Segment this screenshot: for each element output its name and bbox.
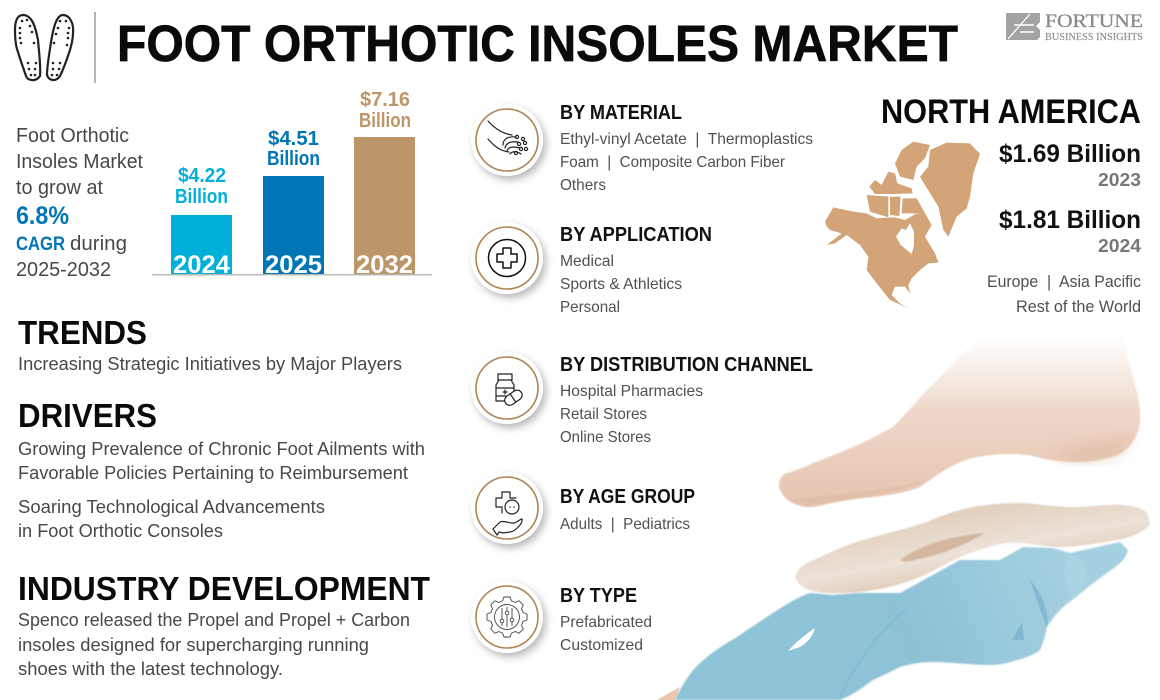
growth summary text: to grow at <box>16 177 103 199</box>
by material: Foam | Composite Carbon Fiber <box>560 154 786 171</box>
growth summary text: 2025-2032 <box>16 259 111 281</box>
by distribution channel <box>560 354 813 446</box>
icon: medical cross <box>471 222 543 294</box>
industry development: INDUSTRY DEVELOPMENT <box>18 570 430 607</box>
trends <box>18 314 402 374</box>
bar chart: market size <box>152 89 432 279</box>
bar chart: market size: Billion <box>359 110 411 132</box>
by application: Medical <box>560 253 614 270</box>
by age group: BY AGE GROUP <box>560 486 695 508</box>
growth summary text: 6.8% <box>16 202 69 230</box>
drivers: in Foot Orthotic Consoles <box>18 521 223 541</box>
by application: Personal <box>560 299 620 316</box>
by material: Ethyl-vinyl Acetate | Thermoplastics <box>560 131 813 148</box>
skin at wrist <box>657 687 680 700</box>
industry development: Spenco released the Propel and Propel + Carbon <box>18 610 410 630</box>
by age group <box>560 486 695 533</box>
bar chart: market size: Billion <box>175 186 228 208</box>
north america values: 2024 <box>1098 236 1141 256</box>
map: north america <box>825 142 980 310</box>
trends: TRENDS <box>18 314 147 351</box>
drivers <box>18 397 425 541</box>
by type: Prefabricated <box>560 614 652 631</box>
bar chart: market size: 2025 <box>265 251 322 279</box>
title icon: insole pair <box>15 15 73 80</box>
icon: material fibers <box>471 104 543 176</box>
north america values: Europe | Asia Pacific <box>987 272 1141 291</box>
bar chart: market size: 2024 <box>173 251 230 279</box>
growth summary text: CAGR <box>16 234 65 255</box>
bar chart: market size: 2032 <box>356 251 413 279</box>
photo: foot above insole held by gloved hands <box>657 330 1149 700</box>
by age group: Adults | Pediatrics <box>560 516 690 533</box>
title: FOOT ORTHOTIC INSOLES MARKET <box>117 15 958 72</box>
by application: Sports & Athletics <box>560 276 682 293</box>
by material: Others <box>560 177 606 194</box>
logo: Fortune Business Insights: BUSINESS INSIGHTS <box>1045 32 1143 43</box>
bar chart: market size: $7.16 <box>360 89 410 111</box>
by distribution channel: Retail Stores <box>560 406 647 423</box>
logo: Fortune Business Insights: FORTUNE <box>1045 11 1143 32</box>
by type: BY TYPE <box>560 585 637 607</box>
north america values: Rest of the World <box>1016 297 1141 316</box>
foot <box>779 330 1140 507</box>
insole <box>795 503 1149 593</box>
by type <box>560 585 652 654</box>
north america values: $1.69 Billion <box>999 140 1141 168</box>
by distribution channel: Online Stores <box>560 429 651 446</box>
by application: BY APPLICATION <box>560 224 712 246</box>
growth summary text: Insoles Market <box>16 151 143 173</box>
drivers: Soaring Technological Advancements <box>18 497 325 517</box>
industry development: insoles designed for supercharging running <box>18 635 369 655</box>
icon: type gear <box>471 581 543 653</box>
trends: Increasing Strategic Initiatives by Major Players <box>18 354 402 374</box>
by type: Customized <box>560 637 643 654</box>
bar chart: market size: $4.51 <box>268 128 319 150</box>
icon: pharmacy bottle and pill <box>471 352 543 424</box>
industry development: shoes with the latest technology. <box>18 659 283 679</box>
by application <box>560 224 712 316</box>
drivers: DRIVERS <box>18 397 157 434</box>
north america values: $1.81 Billion <box>999 206 1141 234</box>
drivers: Growing Prevalence of Chronic Foot Ailments with <box>18 439 425 459</box>
by distribution channel: Hospital Pharmacies <box>560 383 703 400</box>
by material <box>560 102 813 194</box>
gloves <box>675 542 1128 700</box>
bar chart: market size: $4.22 <box>178 165 226 187</box>
drivers: Favorable Policies Pertaining to Reimbursement <box>18 463 408 483</box>
by distribution channel: BY DISTRIBUTION CHANNEL <box>560 354 813 376</box>
industry development <box>18 570 430 679</box>
north america values: 2023 <box>1098 170 1141 190</box>
logo: Fortune Business Insights <box>1006 11 1143 43</box>
icon: age group hand and child <box>471 472 543 544</box>
growth summary text <box>16 125 143 281</box>
by material: BY MATERIAL <box>560 102 682 124</box>
north america values <box>987 140 1141 316</box>
growth summary text: Foot Orthotic <box>16 125 129 147</box>
bar chart: market size: Billion <box>267 148 320 170</box>
growth summary text: during <box>70 233 127 255</box>
